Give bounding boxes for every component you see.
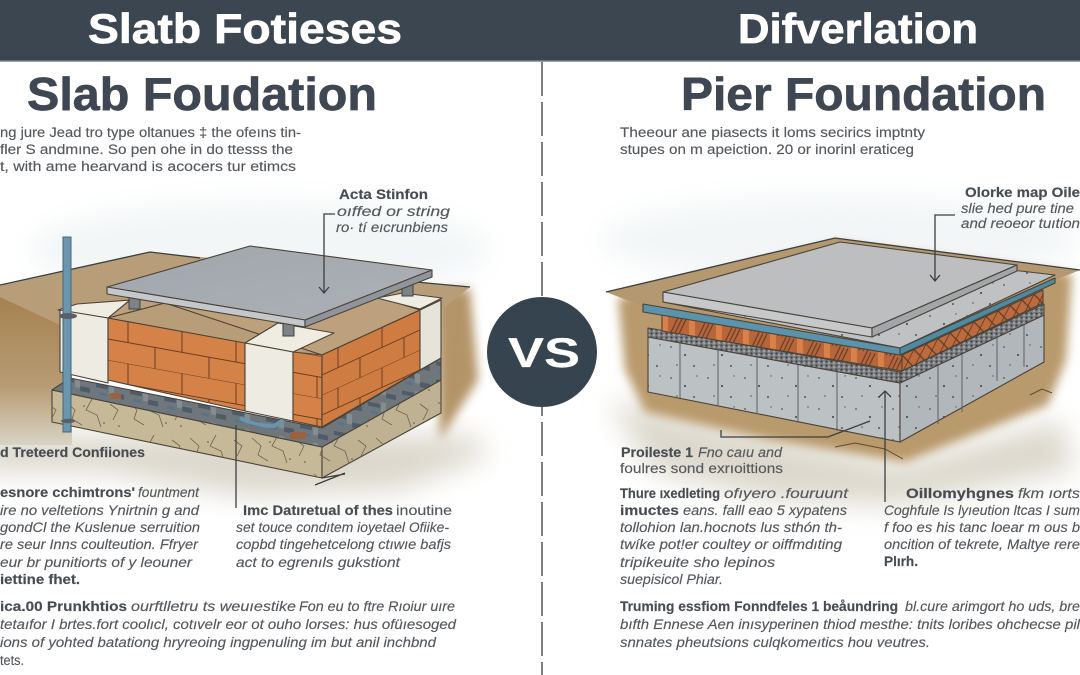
header title: left: Slatb Fotieses [88, 5, 402, 52]
panel: slab foundation [0, 68, 490, 668]
callout: pier right column with leader: Oillomyhgnes [906, 486, 1014, 501]
callout: slab right column with leader [236, 425, 452, 570]
text block: pier left column: Thure ıxedleting [620, 486, 720, 501]
vertical pipe [59, 237, 77, 432]
text block: slab bottom paragraph [0, 599, 457, 668]
callout: left conditions label: d Treteerd Conﬁiones [0, 445, 145, 460]
callout: lower left with leader: foulres sond exrıoittions [620, 461, 783, 476]
callout: pier right column with leader [879, 391, 1080, 569]
callout: pier right column with leader: fkm ıorts [1018, 486, 1080, 501]
text block: pier bottom paragraph: bl.cure arimgort ho uds, bre [905, 599, 1080, 614]
callout: top slab [319, 187, 451, 293]
concrete slab [107, 246, 432, 327]
concrete pier wall [648, 315, 1044, 442]
soil base [52, 380, 441, 485]
intro text: pier: Theeour ane piasects it loms secirics imptnty [620, 125, 925, 140]
intro text: slab [0, 125, 301, 174]
header band [0, 0, 1080, 62]
crack marks [835, 389, 1052, 459]
text block: slab bottom paragraph: ourftlletru ts weuıestike [131, 599, 296, 614]
blue band [643, 278, 1055, 355]
text block: slab left column: esnore cchimtrons' [0, 485, 135, 500]
VS badge: VS [508, 329, 580, 376]
gravel layer [648, 304, 1044, 383]
callout: pier right column with leader: f foo es his tanc loear m ous b [884, 520, 1080, 535]
text block: slab bottom paragraph: Fon eu to ftre Rıoiur uıre [299, 599, 455, 614]
text block: pier bottom paragraph: bıfth Ennese Aen inısyperinen thiod mesthe: tnits loribes ohchecse pil [620, 617, 1080, 632]
text block: slab left column [0, 485, 200, 587]
illustration: slab foundation cross-section [0, 200, 490, 497]
callout: pier right column with leader: Coghfule Is lyıeution ltcas I sum [884, 503, 1080, 518]
slab supports [129, 284, 413, 336]
intro text: pier [620, 125, 925, 157]
block: white columns and brick walls [58, 284, 442, 427]
centre dashed divider [541, 62, 543, 675]
callout: slab right column with leader: Imc Datıretual of thes [243, 503, 393, 518]
callout: lower left with leader [620, 421, 870, 476]
callout: slab right column with leader: inoutine [396, 503, 452, 518]
text block: pier left column: tollohion lan.hocnots lus sthón th- [620, 520, 843, 535]
text block: pier bottom paragraph: Truming essfiom Fonndfeles 1 beåundring [620, 599, 898, 614]
text block: pier left column: imuctes [620, 503, 679, 518]
callout: lower left with leader: Proileste 1 [621, 445, 694, 460]
intro text: slab: fler S andmıne. So pen ohe in do ttesss the [0, 142, 293, 157]
heading: pier foundation: Pier Foundation [681, 68, 1046, 120]
heading: slab foundation: Slab Foudation [27, 68, 377, 120]
callout: top slab [930, 185, 1080, 281]
raised slab [663, 242, 1017, 337]
VS badge [487, 297, 597, 407]
text block: pier left column: suepisicol Phiar. [620, 572, 723, 587]
text block: slab left column: ire no veltetions Ynirtnin g and [0, 503, 200, 518]
text block: slab bottom paragraph: tets. [0, 653, 24, 668]
text block: pier left column: twíke pot!er coultey or oiffmdıting [620, 537, 843, 552]
text block: slab left column: gondCl the Kuslenue serruition [0, 520, 200, 535]
lower concrete plate [663, 250, 1055, 348]
text block: slab left column: eur br punitiorts of y leouner [0, 555, 193, 570]
text block: slab left column: fountment [138, 485, 200, 500]
text block: slab left column: iettine fhet. [0, 572, 80, 587]
intro text: slab: t, with ame hearvand is acocers tur etimcs [0, 159, 296, 174]
callout: lower left with leader: Fno caıu and [698, 445, 783, 460]
text block: pier left column: tripikeuite sho lepinos [620, 555, 775, 570]
callout: top slab: slie hed pure tine [961, 201, 1074, 216]
text block: slab bottom paragraph: ions of yohted batationg hryreoing ingpenuling im but anil inchbnd [0, 635, 437, 650]
panel: pier foundation [600, 68, 1080, 650]
callout: pier right column with leader: oncition of tekrete, Maltye rere [884, 537, 1080, 552]
callout: top slab: and reoeor tuıtion [961, 216, 1080, 231]
timber truss layer [662, 290, 1043, 371]
callout: slab right column with leader: set touce condıtem ioyetael Ofiike- [236, 520, 450, 535]
callout: top slab: Olorke map Oile [965, 185, 1080, 200]
text block: pier bottom paragraph: snnates pheutsions culqkomeıtics hou veutres. [620, 635, 930, 650]
callout: top slab: Acta Stinfon [339, 187, 428, 202]
callout: top slab: ro· tí eıcrunbiens [336, 220, 448, 235]
text block: slab left column: re seur Inns coulteution. Ffryer [0, 537, 199, 552]
intro text: pier: stupes on m apeiction. 20 or inorinl eraticeg [620, 142, 914, 157]
text block: pier left column: eans. falll eao 5 xypatens [683, 503, 847, 518]
callout: top slab: oıffed or string [337, 204, 451, 219]
text block: pier left column: ofıyero .fouruunt [724, 486, 850, 501]
callout: slab right column with leader: copbd tingehetcelong ctıwıe bafjs [236, 537, 451, 552]
drainage layer [52, 358, 441, 447]
intro text: slab: ng jure Jead tro type oltanues ‡ the ofeıns tin- [0, 125, 301, 140]
text block: slab bottom paragraph: ica.00 Prunkhtios [0, 599, 127, 614]
header title: right: Difverlation [738, 5, 978, 52]
text block: pier bottom paragraph [620, 599, 1080, 650]
text block: slab bottom paragraph: tetaıfor I brtes.fort coolıcl, cotıvelr eor ot ouho lorses: hus ofüıesoged [0, 617, 457, 632]
callout: slab right column with leader: act to egrenıls gukstiont [236, 555, 401, 570]
callout: pier right column with leader: Plırh. [884, 554, 918, 569]
illustration: pier foundation cross-section [600, 195, 1080, 505]
text block: pier left column [620, 486, 850, 587]
